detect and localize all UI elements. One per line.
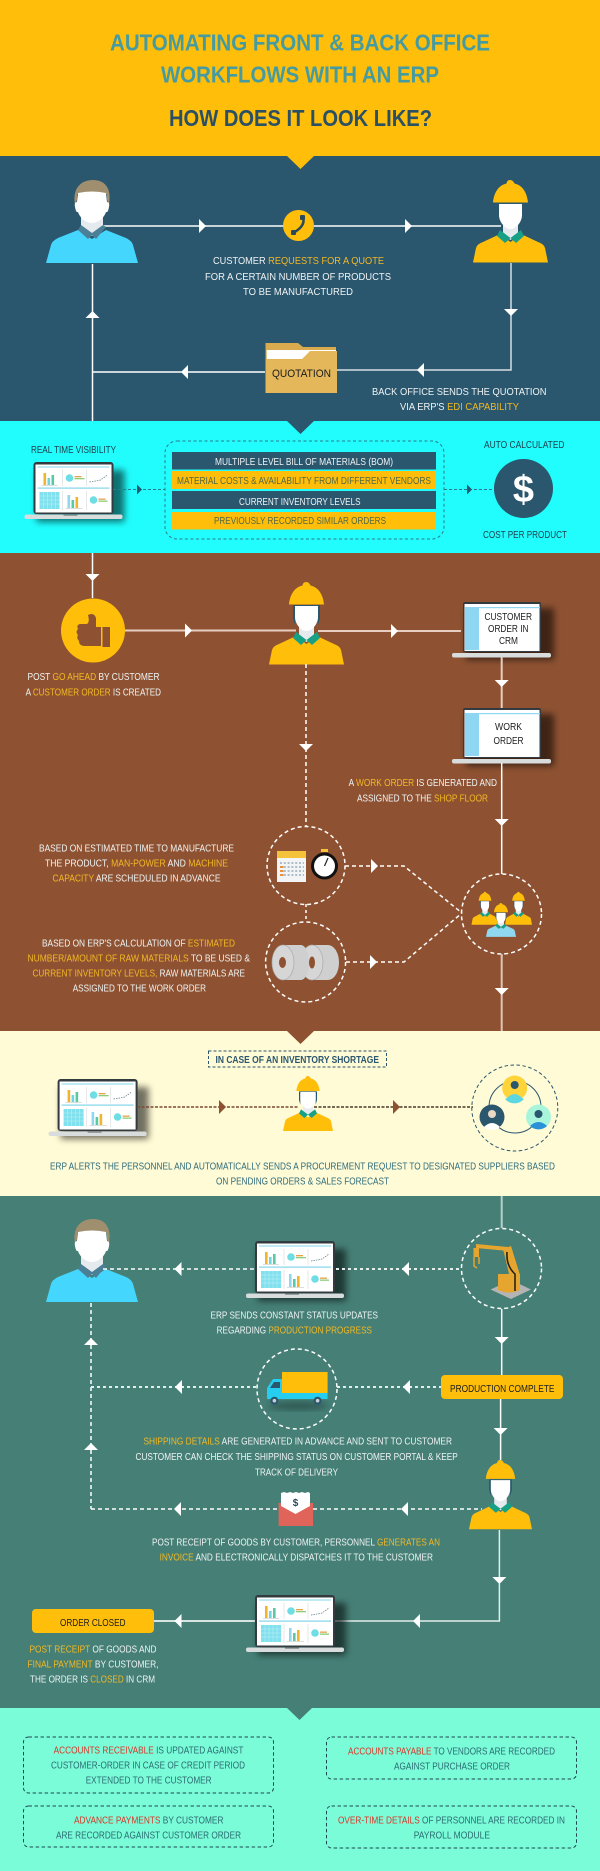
panel: real time visibility	[0, 421, 600, 553]
callout: over-time details: OVER-TIME DETAILS OF PERSONNEL ARE RECORDED IN	[338, 1814, 565, 1826]
text: shipping details	[136, 1436, 458, 1478]
arrow: truck to customer	[91, 1380, 257, 1394]
text: back office sends quotation	[372, 386, 546, 413]
callout: over-time details	[326, 1806, 576, 1848]
panel: order and work order	[0, 553, 600, 1031]
icon: thumbs up	[61, 598, 125, 662]
arrow: folder to customer	[86, 264, 265, 421]
icon: laptop dashboard	[246, 1241, 346, 1301]
panel: quote request	[0, 156, 600, 421]
panel: accounting	[0, 1708, 600, 1871]
icon: invoice envelope: $	[293, 1498, 299, 1509]
text: customer requests a quote: TO BE MANUFACTURED	[243, 286, 353, 298]
arrow: CRM to work order	[495, 657, 509, 708]
arrow: materials to team	[346, 913, 462, 969]
text: scheduling: THE PRODUCT, MAN-POWER AND MACHINE	[45, 858, 228, 870]
icon: quotation folder: QUOTATION	[272, 368, 331, 380]
text: work order generated: ASSIGNED TO THE SHOP FLOOR	[357, 792, 488, 804]
arrow: work order to shop floor	[495, 763, 509, 874]
text: order closed description: THE ORDER IS CLOSED IN CRM	[30, 1674, 155, 1686]
label: auto calculated: AUTO CALCULATED	[484, 439, 565, 451]
bar: bill of materials: MULTIPLE LEVEL BILL OF MATERIALS (BOM)	[215, 456, 393, 468]
arrow: schedule to team	[345, 859, 462, 913]
arrow: quote to go ahead	[86, 553, 100, 598]
bar: similar orders: PREVIOUSLY RECORDED SIMILAR ORDERS	[214, 515, 386, 527]
text: back office sends quotation: VIA ERP'S EDI CAPABILITY	[400, 401, 519, 413]
panel: title header	[0, 0, 600, 156]
text: invoice dispatch: INVOICE AND ELECTRONICALLY DISPATCHES IT TO THE CUSTOMER	[160, 1552, 433, 1564]
text: procurement request: ON PENDING ORDERS & SALES FORECAST	[216, 1176, 389, 1188]
arrow: laptop to personnel	[137, 1100, 298, 1114]
arrow: go ahead to engineer	[125, 624, 296, 638]
label: in case of inventory shortage: IN CASE OF AN INVENTORY SHORTAGE	[216, 1054, 379, 1066]
panel: data list	[165, 441, 444, 539]
text: invoice dispatch: POST RECEIPT OF GOODS BY CUSTOMER, PERSONNEL GENERATES AN	[152, 1536, 440, 1548]
text: work order generated: A WORK ORDER IS GENERATED AND	[349, 777, 497, 789]
arrow: personnel to invoice	[313, 1502, 482, 1516]
text: scheduling: CAPACITY ARE SCHEDULED IN ADVANCE	[52, 872, 220, 884]
icon: customer order laptop	[452, 602, 554, 660]
text: raw materials: NUMBER/AMOUNT OF RAW MATERIALS TO BE USED &	[28, 952, 250, 964]
callout: accounts payable: ACCOUNTS PAYABLE TO VENDORS ARE RECORDED	[348, 1746, 555, 1758]
text: work order generated	[349, 777, 497, 804]
icon: laptop dashboard	[246, 1595, 346, 1655]
icon: raw material rolls	[266, 922, 346, 1002]
arrow: laptop to data list	[113, 484, 165, 494]
panel: inventory shortage	[0, 1031, 600, 1196]
text: procurement request	[50, 1160, 555, 1188]
label: order closed: ORDER CLOSED	[60, 1617, 126, 1629]
bar: inventory levels: CURRENT INVENTORY LEVELS	[239, 496, 360, 508]
text: customer requests a quote: CUSTOMER REQUESTS FOR A QUOTE	[213, 255, 384, 267]
icon: dollar circle	[494, 459, 553, 518]
icon: work order laptop: ORDER	[494, 735, 524, 747]
callout: accounts receivable: CUSTOMER-ORDER IN CASE OF CREDIT PERIOD	[51, 1760, 245, 1772]
icon: robot arm	[462, 1228, 542, 1308]
text: customer requests a quote: FOR A CERTAIN NUMBER OF PRODUCTS	[205, 271, 391, 283]
arrow: personnel to ERP	[335, 1530, 506, 1628]
arrow: data list to cost	[444, 484, 494, 494]
title: AUTOMATING FRONT & BACK OFFICE	[110, 30, 490, 56]
label: order closed	[32, 1609, 154, 1633]
icon: work order laptop: WORK	[495, 721, 522, 733]
icon: customer order laptop: ORDER IN	[488, 623, 528, 635]
text: order closed description: POST RECEIPT OF GOODS AND	[30, 1644, 157, 1656]
arrow: production complete to personnel	[494, 1399, 508, 1460]
text: status updates	[210, 1310, 378, 1336]
arrow: personnel to suppliers	[314, 1100, 473, 1114]
callout: advance payments	[24, 1806, 274, 1847]
arrow: production complete to truck	[337, 1380, 441, 1394]
text: raw materials: BASED ON ERP'S CALCULATION OF ESTIMATED	[42, 938, 235, 950]
bar: similar orders	[172, 512, 436, 530]
text: scheduling: BASED ON ESTIMATED TIME TO MANUFACTURE	[39, 842, 234, 854]
arrow: customer receives shipping and invoice	[84, 1303, 98, 1509]
icon: invoice envelope	[279, 1492, 313, 1526]
text: customer requests a quote	[205, 255, 391, 298]
text: raw materials	[28, 938, 250, 994]
icon: laptop dashboard	[24, 462, 124, 522]
text: invoice dispatch	[152, 1536, 440, 1564]
icon: customer	[46, 1219, 138, 1302]
icon: engineer	[269, 582, 344, 664]
icon: customer	[46, 180, 138, 263]
text: raw materials: CURRENT INVENTORY LEVELS, RAW MATERIALS ARE	[32, 968, 245, 980]
icon: engineer	[473, 180, 548, 262]
icon: quotation folder	[266, 343, 337, 393]
label: production complete: PRODUCTION COMPLETE	[450, 1383, 554, 1395]
icon: delivery truck	[257, 1349, 337, 1429]
arrow: engineer dashed to schedule	[299, 664, 313, 827]
icon: calendar and stopwatch	[267, 826, 345, 904]
text: scheduling	[39, 842, 234, 884]
text: order closed description: FINAL PAYMENT BY CUSTOMER,	[28, 1658, 158, 1670]
label: cost per product: COST PER PRODUCT	[483, 529, 567, 541]
bar: material costs	[172, 471, 436, 489]
icon: personnel	[283, 1076, 333, 1131]
label: in case of inventory shortage	[208, 1051, 386, 1067]
icon: work order laptop	[452, 708, 554, 766]
arrow: into robot	[501, 1196, 503, 1228]
icon: shop floor team	[462, 874, 542, 954]
icon: personnel	[469, 1460, 532, 1529]
text: go ahead: POST GO AHEAD BY CUSTOMER	[28, 671, 160, 683]
text: shipping details: SHIPPING DETAILS ARE GENERATED IN ADVANCE AND SENT TO CUSTOMER	[144, 1436, 452, 1448]
icon: customer order laptop: CUSTOMER	[484, 611, 532, 623]
bar: inventory levels	[172, 491, 436, 509]
arrow: ERP to customer	[103, 1262, 255, 1276]
text: shipping details: TRACK OF DELIVERY	[255, 1466, 338, 1478]
text: shipping details: CUSTOMER CAN CHECK THE SHIPPING STATUS ON CUSTOMER PORTAL & KEEP	[136, 1451, 458, 1463]
connector: schedule to materials	[305, 904, 307, 922]
icon: customer order laptop: CRM	[499, 635, 518, 647]
heading: real time visibility: REAL TIME VISIBILITY	[31, 444, 116, 456]
callout: accounts receivable: ACCOUNTS RECEIVABLE IS UPDATED AGAINST	[54, 1744, 244, 1756]
text: order closed description	[28, 1644, 158, 1686]
subtitle: HOW DOES IT LOOK LIKE?	[169, 105, 432, 131]
panel: production and closing	[0, 1196, 600, 1708]
arrow: engineer to CRM	[318, 624, 461, 638]
text: raw materials: ASSIGNED TO THE WORK ORDER	[73, 982, 206, 994]
title	[110, 30, 490, 88]
text: back office sends quotation: BACK OFFICE SENDS THE QUOTATION	[372, 386, 546, 398]
arrow: robot to production complete	[495, 1309, 509, 1375]
bar: bill of materials	[172, 452, 436, 470]
arrow: robot to ERP	[336, 1262, 461, 1276]
callout: accounts payable	[326, 1737, 576, 1779]
arrow: engineer to folder	[337, 263, 518, 377]
callout: accounts payable: AGAINST PURCHASE ORDER	[394, 1760, 510, 1772]
title: WORKFLOWS WITH AN ERP	[161, 62, 439, 88]
icon: suppliers network	[472, 1065, 558, 1151]
text: go ahead: A CUSTOMER ORDER IS CREATED	[26, 686, 161, 698]
icon: dollar circle: $	[513, 469, 534, 511]
text: status updates: ERP SENDS CONSTANT STATUS UPDATES	[210, 1310, 378, 1322]
callout: accounts receivable: EXTENDED TO THE CUSTOMER	[86, 1774, 212, 1786]
callout: advance payments: ADVANCE PAYMENTS BY CUSTOMER	[74, 1814, 224, 1826]
callout: advance payments: ARE RECORDED AGAINST CUSTOMER ORDER	[56, 1830, 241, 1842]
label: production complete	[441, 1375, 563, 1399]
text: go ahead	[26, 671, 161, 698]
icon: laptop dashboard	[49, 1079, 149, 1139]
callout: over-time details: PAYROLL MODULE	[414, 1830, 490, 1842]
arrow: invoice to customer	[91, 1502, 280, 1516]
icon: phone	[283, 210, 314, 241]
arrow: team to inventory check	[495, 954, 509, 1031]
arrow: ERP to order closed	[154, 1614, 256, 1628]
bar: material costs: MATERIAL COSTS & AVAILABILITY FROM DIFFERENT VENDORS	[177, 475, 431, 487]
callout: accounts receivable	[24, 1737, 274, 1793]
text: status updates: REGARDING PRODUCTION PROGRESS	[217, 1324, 372, 1336]
arrow: customer to engineer via phone	[103, 219, 501, 233]
